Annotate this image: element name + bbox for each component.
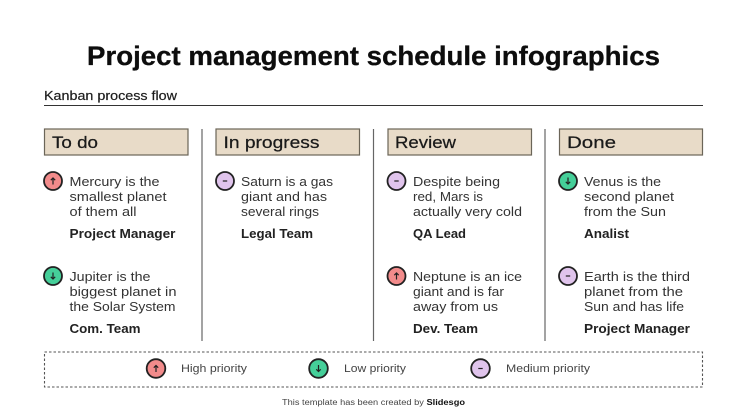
task: Saturn: giant and has [241,189,328,204]
icon: high priority [147,359,165,378]
legend label: high priority: High priority [181,363,248,375]
panel: To do [44,129,188,336]
task: Mercury: Mercury is the [70,174,160,189]
task: Mercury: Project Manager [70,227,176,241]
panel: Done [559,129,702,336]
legend label: medium priority: Medium priority [506,363,591,375]
task: Venus [584,174,674,241]
task: Neptune: away from us [413,299,499,314]
legend label: low priority: Low priority [344,363,407,375]
icon: high priority [388,267,406,285]
task: Saturn: Legal Team [241,227,313,241]
task: Earth: planet from the [584,284,683,299]
task: Jupiter: Jupiter is the [70,269,150,284]
task: Venus: Analist [584,227,630,241]
task: Neptune: giant and is far [413,284,505,299]
icon: high priority [44,172,62,190]
task: Mercury: of them all [70,204,137,219]
subtitle: Kanban process flow: Kanban process flow [44,89,178,103]
task: Earth: Project Manager [584,322,690,336]
task: Neptune: Neptune is an ice [413,269,522,284]
icon: medium priority [216,172,234,190]
heading: In progress [216,129,360,155]
task: Mars: actually very cold [413,204,522,219]
task: Venus: from the Sun [584,204,666,219]
heading: To do: To do [52,133,98,152]
task: Mars: Despite being [413,174,500,189]
panel: Review [388,129,532,336]
task: Jupiter [70,269,176,336]
heading: Review [388,129,532,155]
icon: low priority [44,267,62,285]
task: Venus: second planet [584,189,674,204]
task: Mercury [70,174,176,241]
task: Earth: Sun and has life [584,299,684,314]
task: Saturn [241,174,334,241]
task: Jupiter: biggest planet in [70,284,176,299]
task: Earth: Earth is the third [584,269,690,284]
task: Saturn: Saturn is a gas [241,174,334,189]
task: Venus: Venus is the [584,174,661,189]
task: Jupiter: Com. Team [70,322,140,336]
icon: medium priority [471,359,490,378]
icon: medium priority [559,267,577,285]
heading: To do [44,129,188,155]
task: Neptune [413,269,522,336]
heading: Review: Review [395,133,457,152]
heading: Done [560,129,702,155]
task: Mercury: smallest planet [70,189,167,204]
icon: low priority [309,359,328,378]
task: Mars: QA Lead [413,227,466,241]
title: Project management schedule infographics [87,41,660,71]
heading: In progress: In progress [224,133,320,152]
task: Saturn: several rings [241,204,320,219]
panel: In progress [216,129,360,241]
icon: low priority [559,172,577,190]
footer credit: This template has been created by Slidesgo [282,398,465,407]
task: Earth [584,269,690,336]
heading: Done: Done [567,133,616,152]
legend [44,352,702,387]
task: Mars [413,174,522,241]
task: Mars: red, Mars is [413,189,484,204]
task: Neptune: Dev. Team [413,322,478,336]
task: Jupiter: the Solar System [70,299,176,314]
icon: medium priority [388,172,406,190]
